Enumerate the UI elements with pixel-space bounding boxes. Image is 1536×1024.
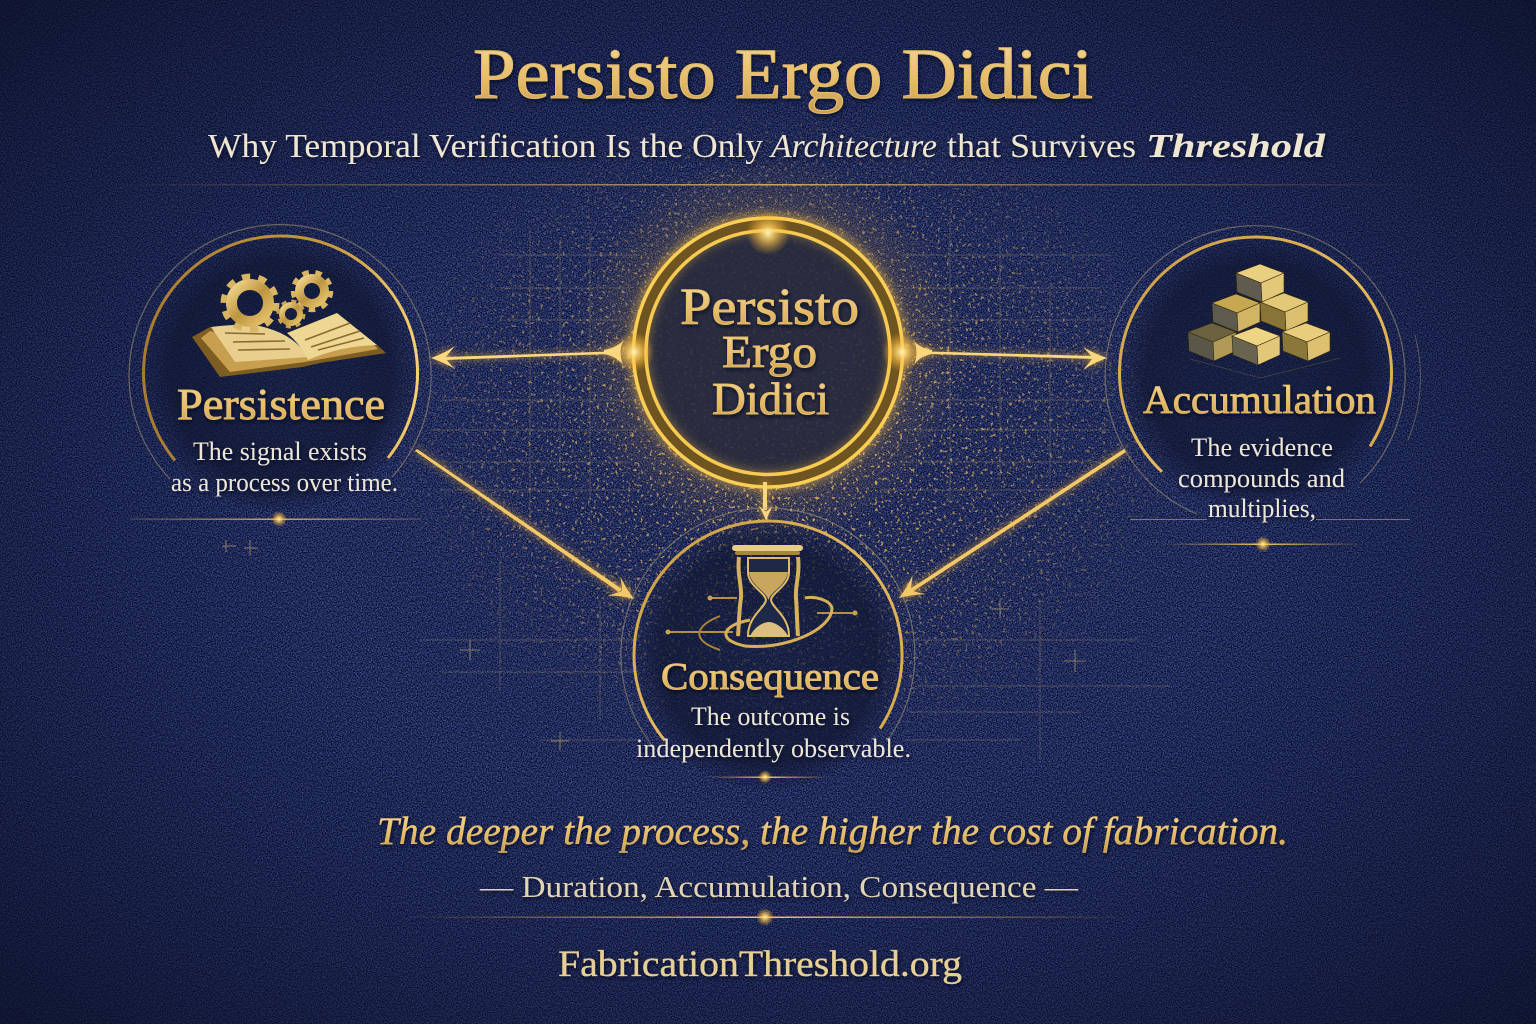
description: accumulation: compounds and xyxy=(1178,464,1345,493)
description: accumulation: The evidence xyxy=(1191,433,1333,462)
description: accumulation xyxy=(1178,433,1345,523)
accent line: persistence xyxy=(125,511,430,527)
description: persistence xyxy=(171,437,398,497)
description: consequence: independently observable. xyxy=(636,734,911,763)
description: persistence: as a process over time. xyxy=(171,468,398,497)
icon: stacked gold cubes xyxy=(1188,264,1340,378)
arrow: center to accumulation xyxy=(914,341,1107,370)
heading: accumulation: Accumulation xyxy=(1143,377,1376,422)
arrow: center to persistence xyxy=(431,341,623,369)
heading: persistence: Persistence xyxy=(177,380,385,429)
center node xyxy=(573,157,963,547)
center label: Ergo xyxy=(722,326,817,377)
closing subline: — Duration, Accumulation, Consequence — xyxy=(479,869,1079,904)
panel: accumulation xyxy=(1105,226,1420,523)
footer url: FabricationThreshold.org xyxy=(558,944,962,985)
subtitle xyxy=(208,128,1326,165)
icon: gears and open book xyxy=(192,272,386,377)
header divider xyxy=(110,184,1430,186)
arrow: accumulation to consequence xyxy=(892,449,1126,607)
footer divider xyxy=(400,908,1135,926)
small stars xyxy=(222,540,1086,750)
accent lines: accumulation xyxy=(1130,520,1410,552)
closing statement: The deeper the process, the higher the cost of fabrication. xyxy=(377,810,1288,853)
icon: hourglass with orbit xyxy=(666,545,858,650)
panel: persistence xyxy=(129,225,431,510)
center label: Persisto xyxy=(680,279,859,336)
gold dust field xyxy=(386,102,1192,751)
subtitle: Threshold xyxy=(1146,128,1326,165)
subtitle: Architecture xyxy=(769,128,937,165)
center label xyxy=(680,279,859,424)
center label: Didici xyxy=(712,373,829,424)
description: consequence xyxy=(636,702,911,763)
subtitle: that Survives xyxy=(947,128,1136,165)
description: consequence: The outcome is xyxy=(691,702,850,731)
arrow: persistence to consequence xyxy=(415,449,640,609)
arrow: center to consequence xyxy=(758,482,773,521)
description: persistence: The signal exists xyxy=(193,437,367,466)
description: accumulation: multiplies, xyxy=(1208,494,1316,523)
heading: consequence: Consequence xyxy=(661,656,879,698)
blueprint grid lines xyxy=(130,215,1170,760)
panel: consequence xyxy=(621,508,915,789)
subtitle: Why Temporal Verification Is the Only xyxy=(208,128,763,165)
title: Persisto Ergo Didici xyxy=(473,34,1093,114)
accent line: consequence xyxy=(705,770,830,784)
